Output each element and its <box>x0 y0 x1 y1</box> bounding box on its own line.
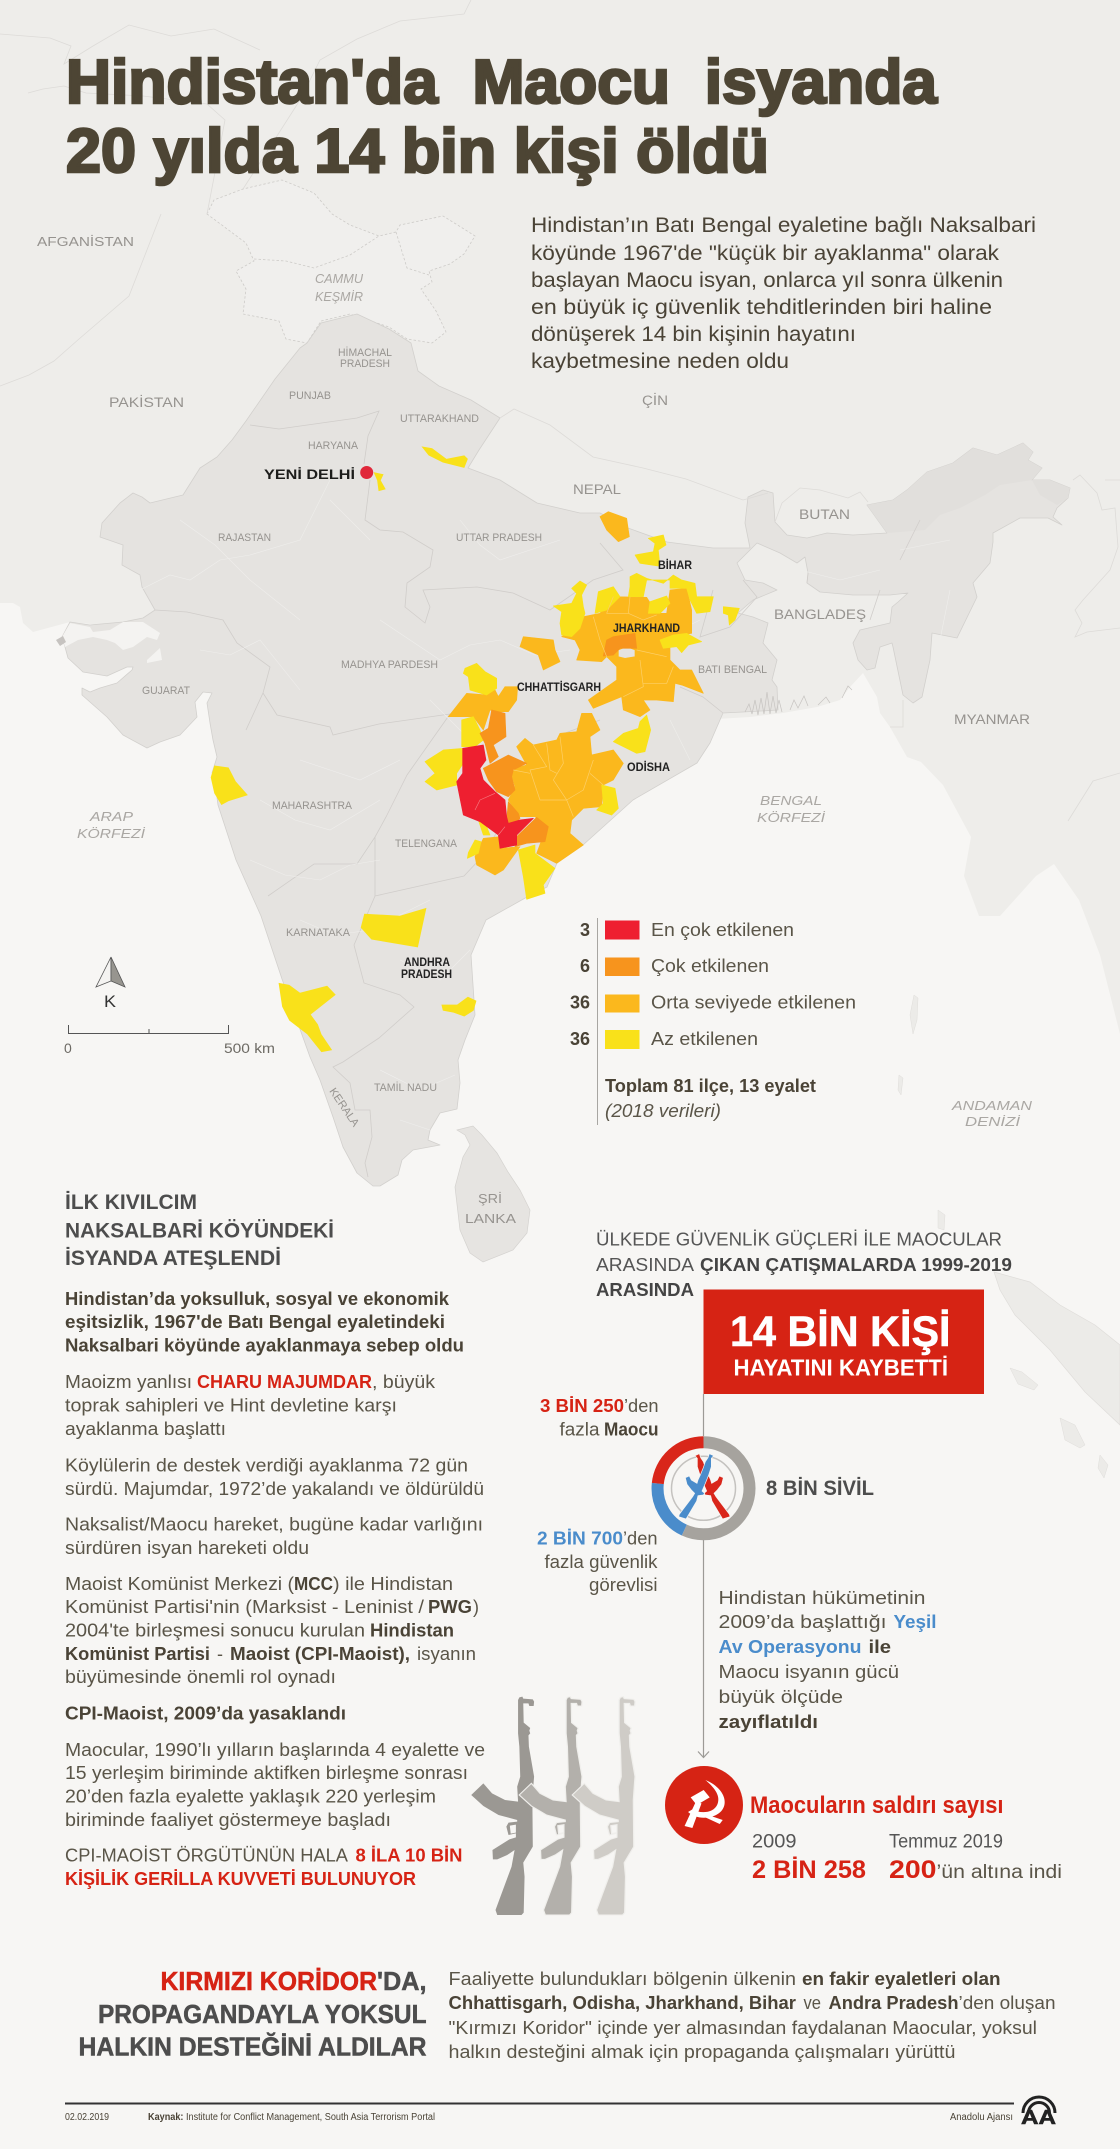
legend row: highly affected: Çok etkilenen <box>651 956 769 976</box>
paragraph: party merger: büyümesinde önemli rol oynadı <box>65 1667 336 1687</box>
map labels: countries, seas and states: TELENGANA <box>395 838 458 850</box>
map labels: countries, seas and states: KÖRFEZİ <box>757 811 826 825</box>
paragraph: party merger: MCC <box>294 1574 333 1594</box>
red corridor text: Chhattisgarh, Odisha, Jharkhand, Bihar <box>448 1993 796 2013</box>
paragraph: party merger: Hindistan <box>370 1620 454 1640</box>
intro text: kaybetmesine neden oldu <box>531 350 789 373</box>
intro text <box>531 214 1036 373</box>
paragraph: Charu Majumdar: CHARU MAJUMDAR <box>197 1372 372 1392</box>
paragraph: movement: sürdüren isyan hareketi oldu <box>65 1538 309 1558</box>
red corridor text: Faaliyette bulundukları bölgenin ülkenin <box>448 1969 796 1989</box>
Maoist attacks stats: 2009 <box>752 1832 796 1852</box>
red corridor heading <box>78 1966 427 2062</box>
Green Hunt operation text: Maocu isyanın gücü <box>718 1662 899 1682</box>
affected state labels: ODİSHA <box>627 761 670 774</box>
paragraph: party merger: Komünist Partisi <box>65 1644 210 1664</box>
map labels: countries, seas and states: BENGAL <box>760 794 822 808</box>
scale bar: 500 km <box>224 1040 275 1056</box>
red callout: 14 bin kişi: HAYATINI KAYBETTİ <box>734 1354 948 1380</box>
security forces deaths label: fazla güvenlik <box>544 1552 659 1572</box>
map labels: countries, seas and states: LANKA <box>465 1211 516 1226</box>
lead paragraph: Hindistan’da yoksulluk, sosyal ve ekonomik <box>65 1289 450 1309</box>
deaths intro heading: ÇIKAN ÇATIŞMALARDA 1999-2019 <box>700 1254 1012 1275</box>
security forces deaths label: 2 BİN 700 <box>537 1528 623 1548</box>
icon: compass <box>96 957 125 1011</box>
map labels: countries, seas and states: ŞRİ <box>478 1191 502 1206</box>
paragraph: guerrilla force: CPI-MAOİST ÖRGÜTÜNÜN HALA <box>65 1846 348 1866</box>
western and southern affected districts <box>211 766 476 1052</box>
paragraph: Charu Majumdar: Maoizm yanlısı <box>65 1372 192 1392</box>
icon: hammer and sickle <box>665 1766 743 1844</box>
legend row: most affected: 3 <box>580 920 590 940</box>
deaths intro heading <box>596 1228 1012 1300</box>
map labels: countries, seas and states: KARNATAKA <box>286 927 351 939</box>
Maoist deaths label: ’den <box>624 1396 658 1416</box>
footer: Anadolu Ajansı <box>950 2112 1013 2123</box>
intro text: dönüşerek 14 bin kişinin hayatını <box>531 323 856 346</box>
map labels: countries, seas and states: HARYANA <box>308 440 359 452</box>
legend <box>570 918 856 1125</box>
deaths intro heading: ARASINDA <box>596 1279 694 1300</box>
Maoist deaths label: 3 BİN 250 <box>540 1396 624 1416</box>
red corridor text: en fakir eyaletleri olan <box>802 1969 1000 1989</box>
section heading: İLK KIVILCIM <box>65 1191 197 1214</box>
Maoist attacks stats: ’ün altına indi <box>936 1862 1062 1883</box>
Green Hunt operation text: zayıflatıldı <box>718 1712 818 1732</box>
scale bar: 0 <box>64 1040 72 1056</box>
footer: 02.02.2019 <box>65 2112 109 2123</box>
red corridor text: "Kırmızı Koridor" içinde yer almasından faydalanan Maocular, yoksul <box>448 2018 1037 2038</box>
map labels: countries, seas and states: ÇİN <box>642 393 668 408</box>
map labels: countries, seas and states: MAHARASHTRA <box>272 800 353 812</box>
intro text: başlayan Maocu isyan, onlarca yıl sonra ülkenin <box>531 269 1003 292</box>
icon: AA logo <box>1021 2097 1056 2129</box>
legend row: most affected: En çok etkilenen <box>651 920 794 940</box>
legend row: medium affected: 36 <box>570 992 590 1012</box>
deaths intro heading: ÜLKEDE GÜVENLİK GÜÇLERİ İLE MAOCULAR <box>596 1228 1002 1250</box>
map labels: countries, seas and states: PRADESH <box>340 358 390 370</box>
Green Hunt operation text: Av Operasyonu <box>718 1637 862 1657</box>
paragraph: Charu Majumdar: , büyük <box>372 1372 436 1392</box>
paragraph: party merger: isyanın <box>417 1644 476 1664</box>
legend row: least affected: Az etkilenen <box>651 1029 758 1049</box>
Maoist attacks stats <box>750 1792 1062 1884</box>
legend row: most affected <box>580 920 794 940</box>
red corridor heading: 'DA, <box>377 1966 426 1996</box>
paragraph: expansion <box>65 1740 485 1830</box>
Maoist deaths label: Maocu <box>604 1420 658 1440</box>
Arunachal shading <box>867 443 1042 533</box>
paragraph: Charu Majumdar: toprak sahipleri ve Hint devletine karşı <box>65 1396 397 1416</box>
icon: compass: K <box>104 992 117 1011</box>
paragraph: party merger: ) ile Hindistan <box>333 1574 453 1594</box>
paragraph: expansion: Maocular, 1990’lı yılların başlarında 4 eyalette ve <box>65 1740 485 1760</box>
map labels: countries, seas and states: BATI BENGAL <box>698 664 767 676</box>
icon: AA logo: AA <box>1021 2107 1056 2129</box>
legend row: least affected: 36 <box>570 1029 590 1049</box>
affected state labels: BİHAR <box>658 559 693 572</box>
title <box>66 48 938 186</box>
paragraph: party merger: Komünist Partisi'nin (Marksist - Leninist / <box>65 1597 424 1617</box>
paragraph: party merger: Maoist Komünist Merkezi ( <box>65 1574 294 1594</box>
legend row: least affected <box>570 1029 758 1049</box>
map labels: countries, seas and states: AFGANİSTAN <box>37 234 134 249</box>
legend total: Toplam 81 ilçe, 13 eyalet <box>605 1076 816 1096</box>
paragraph: party merger <box>65 1574 479 1687</box>
map labels: countries, seas and states: NEPAL <box>573 482 622 497</box>
Maoist attacks stats: Maocuların saldırı sayısı <box>750 1792 1004 1819</box>
northern affected districts <box>374 446 468 491</box>
paragraph: party merger: - <box>217 1644 223 1664</box>
legend row: highly affected <box>580 956 769 976</box>
paragraph: Charu Majumdar: ayaklanma başlattı <box>65 1419 226 1439</box>
footer: Kaynak: Institute for Conflict Management, South Asia Terrorism Portal <box>148 2112 435 2123</box>
red callout: 14 bin kişi <box>704 1290 984 1394</box>
section heading <box>65 1191 334 1270</box>
map labels: countries, seas and states: PUNJAB <box>289 390 331 402</box>
lead paragraph: Naksalbari köyünde ayaklanmaya sebep oldu <box>65 1336 464 1356</box>
Maoist attacks stats: 2 BİN 258 <box>752 1856 866 1884</box>
map labels: countries, seas and states: RAJASTAN <box>218 532 271 544</box>
Maoist attacks stats: 200 <box>889 1856 936 1884</box>
district borders <box>140 480 950 1130</box>
map labels: countries, seas and states: MYANMAR <box>954 712 1030 727</box>
map labels: countries, seas and states: CAMMU <box>315 272 364 286</box>
donut chart: deaths <box>658 1442 750 1534</box>
security forces deaths label: görevlisi <box>589 1575 658 1595</box>
Green Hunt operation text: ile <box>868 1637 891 1657</box>
Green Hunt operation text: büyük ölçüde <box>718 1687 843 1707</box>
left article: İlk kıvılcım <box>65 1191 485 1889</box>
paragraph: guerrilla force: KİŞİLİK GERİLLA KUVVETİ BULUNUYOR <box>65 1869 416 1889</box>
red corridor heading: PROPAGANDAYLA YOKSUL <box>98 1999 427 2029</box>
red corridor text: halkın desteğini almak için propaganda çalışmaları yürüttü <box>448 2042 956 2062</box>
map labels: countries, seas and states: UTTARAKHAND <box>400 413 479 425</box>
paragraph: party merger: ) <box>473 1597 479 1617</box>
paragraph: uprising <box>65 1456 484 1499</box>
intro text: Hindistan’ın Batı Bengal eyaletine bağlı Naksalbari <box>531 214 1036 237</box>
map labels: countries, seas and states: ANDAMAN <box>951 1099 1033 1113</box>
legend row: medium affected: Orta seviyede etkilenen <box>651 992 856 1012</box>
paragraph: uprising: sürdü. Majumdar, 1972’de yakalandı ve öldürüldü <box>65 1479 484 1499</box>
Green Hunt operation text: Yeşil <box>894 1612 936 1632</box>
Ganges delta <box>745 686 852 715</box>
Rann of Kutch sea areas <box>62 622 162 663</box>
section heading: İSYANDA ATEŞLENDİ <box>65 1247 281 1270</box>
red corridor text: ve <box>804 1993 821 2013</box>
map labels: countries, seas and states: KERALA <box>327 1086 361 1130</box>
Kashmir disputed region <box>207 180 475 343</box>
section heading: NAKSALBARİ KÖYÜNDEKİ <box>65 1220 334 1242</box>
Sri Lanka <box>455 1126 530 1262</box>
security forces deaths label: ’den <box>623 1528 658 1548</box>
scale bar <box>64 1025 275 1056</box>
security forces deaths label <box>537 1528 659 1595</box>
India <box>62 314 1070 1186</box>
Green Hunt operation text: 2009’da başlattığı <box>718 1612 886 1632</box>
map labels: countries, seas and states: TAMİL NADU <box>374 1081 437 1094</box>
paragraph: party merger: 2004'te birleşmesi sonucu kurulan <box>65 1620 365 1640</box>
red corridor text: Andra Pradesh <box>828 1993 958 2013</box>
map labels: countries, seas and states <box>37 234 1033 1226</box>
map labels: countries, seas and states: BUTAN <box>799 507 850 522</box>
lead paragraph: eşitsizlik, 1967'de Batı Bengal eyaletindeki <box>65 1312 445 1332</box>
map labels: countries, seas and states: BANGLADEŞ <box>774 607 866 622</box>
affected state labels: ANDHRA <box>404 957 450 969</box>
civilian deaths label: 8 BİN SİVİL <box>766 1477 874 1500</box>
paragraph: Charu Majumdar <box>65 1372 436 1439</box>
Green Hunt operation text <box>718 1588 936 1732</box>
intro text: köyünde 1967'de "küçük bir ayaklanma" olarak <box>531 242 1000 265</box>
red callout: 14 bin kişi: 14 BİN KİŞİ <box>730 1308 950 1356</box>
footer <box>65 2097 1056 2129</box>
affected state labels: PRADESH <box>401 969 452 981</box>
intro text: en büyük iç güvenlik tehditlerinden biri haline <box>531 296 992 319</box>
legend total: (2018 verileri) <box>605 1101 721 1121</box>
title: Hindistan'da Maocu isyanda <box>66 48 938 117</box>
deaths intro heading: ARASINDA <box>596 1254 695 1275</box>
legend row: highly affected: 6 <box>580 956 590 976</box>
map labels: countries, seas and states: GUJARAT <box>142 685 190 697</box>
paragraph: expansion: biriminde faaliyet göstermeye başladı <box>65 1810 391 1830</box>
red corridor heading: KIRMIZI KORİDOR <box>160 1966 377 1996</box>
paragraph: party merger: PWG <box>428 1597 472 1617</box>
map labels: countries, seas and states: MADHYA PARDESH <box>341 659 438 671</box>
map labels: countries, seas and states: KEŞMİR <box>315 290 363 304</box>
north arrow and scale bar <box>64 957 275 1056</box>
affected state labels: JHARKHAND <box>613 623 680 635</box>
map labels: countries, seas and states: DENİZİ <box>965 1115 1021 1129</box>
paragraph: guerrilla force: 8 İLA 10 BİN <box>356 1846 462 1866</box>
connector line with arrow <box>698 1394 709 1758</box>
Green Hunt operation text: Hindistan hükümetinin <box>718 1588 926 1608</box>
red corridor text <box>448 1969 1056 2062</box>
legend total <box>605 1076 816 1121</box>
Maoist attacks stats: Temmuz 2019 <box>889 1832 1003 1852</box>
map labels: countries, seas and states: KÖRFEZİ <box>77 827 146 841</box>
legend row: medium affected <box>570 992 856 1012</box>
map labels: countries, seas and states: PAKİSTAN <box>109 395 184 410</box>
affected state labels: CHHATTİSGARH <box>517 681 601 694</box>
paragraph: movement <box>65 1514 483 1558</box>
icon: crossed rifles <box>679 1454 730 1519</box>
paragraph: uprising: Köylülerin de destek verdiği ayaklanma 72 gün <box>65 1456 468 1476</box>
paragraph: ban: CPI-Maoist, 2009’da yasaklandı <box>65 1703 346 1723</box>
affected districts <box>211 446 739 1052</box>
Maoist deaths label: fazla <box>560 1420 601 1440</box>
paragraph: expansion: 20’den fazla eyalette yaklaşık 220 yerleşim <box>65 1786 436 1806</box>
paragraph: movement: Naksalist/Maocu hareket, bugüne kadar varlığını <box>65 1514 483 1534</box>
neighbouring country borders <box>0 0 1120 821</box>
paragraph: expansion: 15 yerleşim biriminde aktifken birleşme sonrası <box>65 1763 468 1783</box>
paragraph: guerrilla force <box>65 1846 462 1889</box>
icon: three rifles <box>471 1697 635 1915</box>
affected state labels <box>401 559 693 981</box>
lead paragraph <box>65 1289 464 1356</box>
Maoist deaths label <box>540 1396 658 1440</box>
capital marker: Yeni Delhi: YENİ DELHİ <box>264 466 355 482</box>
red corridor text: ’den oluşan <box>958 1993 1056 2013</box>
paragraph: party merger: Maoist (CPI-Maoist), <box>230 1644 410 1664</box>
map labels: countries, seas and states: UTTAR PRADESH <box>456 532 542 544</box>
map: India and neighbouring countries <box>0 0 1120 1478</box>
state borders <box>155 411 920 1177</box>
title: 20 yılda 14 bin kişi öldü <box>66 117 769 186</box>
map labels: countries, seas and states: HİMACHAL <box>338 346 392 359</box>
map labels: countries, seas and states: ARAP <box>89 810 134 824</box>
red corridor heading: HALKIN DESTEĞİNİ ALDILAR <box>78 2032 427 2062</box>
